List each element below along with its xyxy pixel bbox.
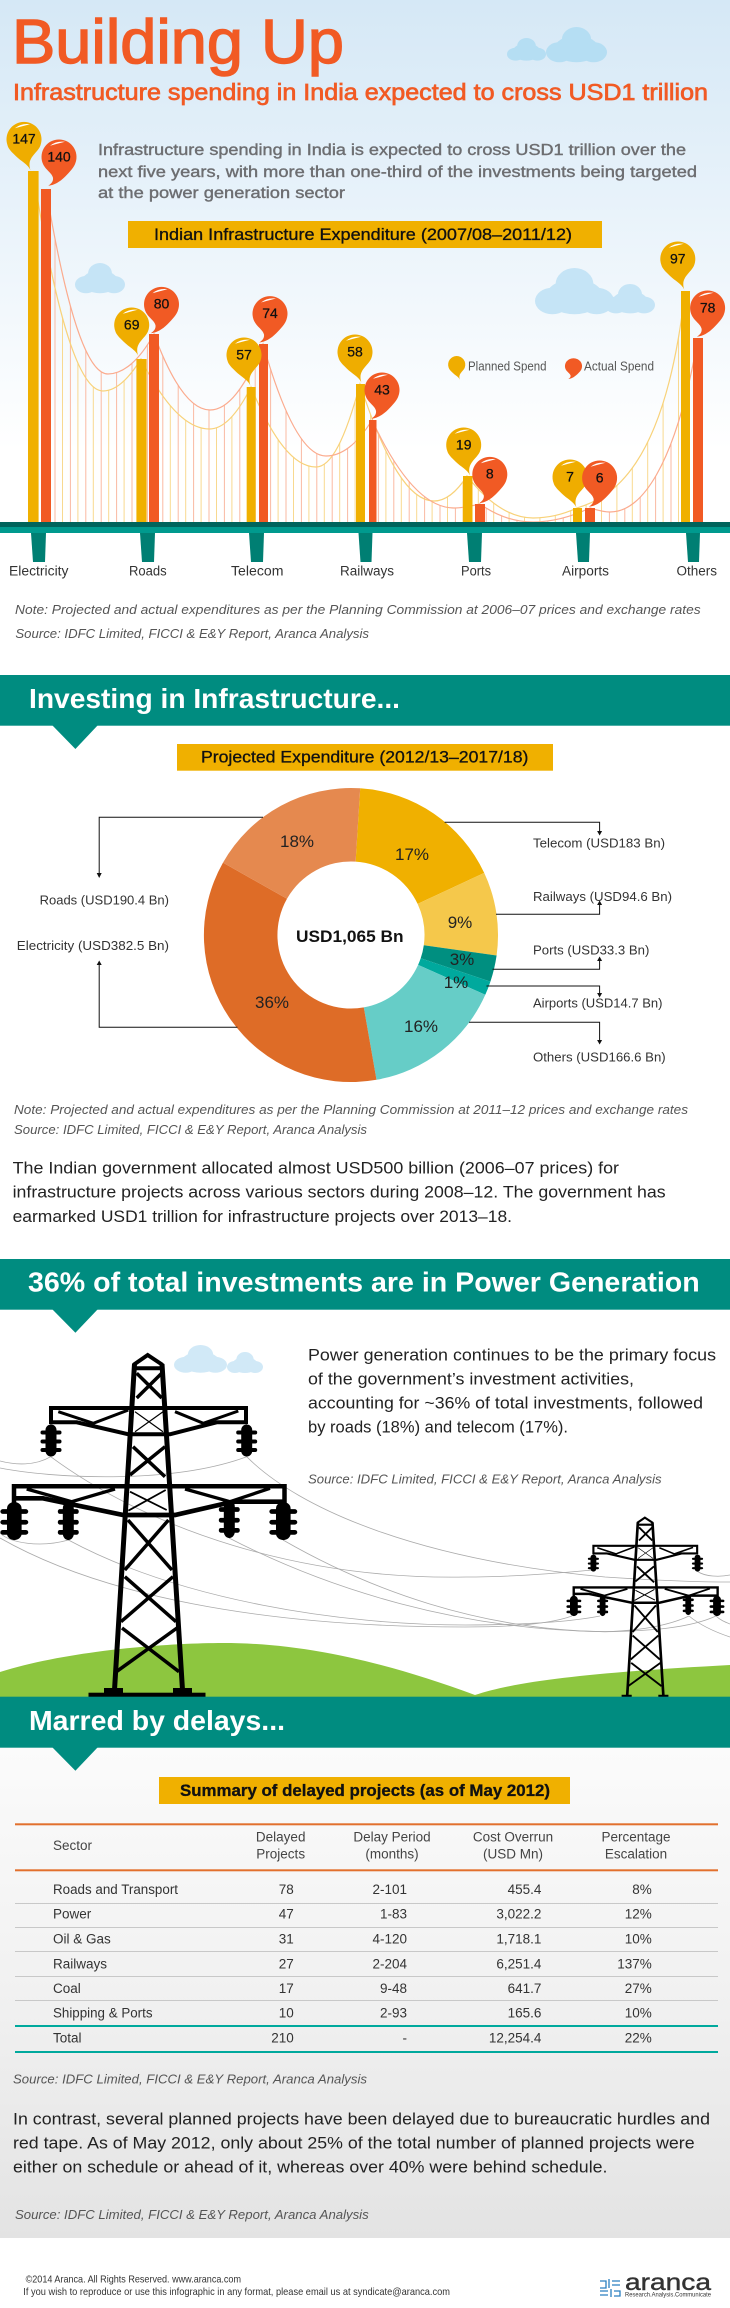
footer copyright: ©2014 Aranca. All Rights Reserved. www.aranca.com bbox=[26, 2274, 241, 2286]
power paragraph: accounting for ~36% of total investments, followed bbox=[308, 1393, 703, 1412]
pin: Roads actual 80 bbox=[144, 287, 179, 333]
section header: Marred by delays: Marred by delays... bbox=[29, 1705, 285, 1736]
pin: Roads planned 69: 69 bbox=[124, 316, 140, 332]
table header row: Escalation bbox=[605, 1846, 667, 1861]
hangers: actual cables bbox=[46, 189, 698, 522]
page background: sky bbox=[0, 0, 730, 675]
donut labels: Roads (USD190.4 Bn) bbox=[40, 892, 169, 907]
allocation paragraph bbox=[13, 1158, 666, 1226]
row: Total: 12,254.4 bbox=[489, 2031, 542, 2046]
allocation paragraph: The Indian government allocated almost USD500 billion (2006–07 prices) for bbox=[13, 1158, 619, 1177]
footer copyright: If you wish to reproduce or use this infographic in any format, please email us at syndicate@aranca.com bbox=[23, 2286, 450, 2298]
table header row: Projects bbox=[256, 1846, 305, 1861]
chart banner bbox=[128, 221, 602, 248]
large transmission tower bbox=[0, 1355, 297, 1698]
percentages: 36% bbox=[255, 993, 289, 1012]
donut banner: Projected Expenditure (2012/13–2017/18) bbox=[201, 749, 528, 767]
table rules bbox=[15, 1823, 718, 2053]
table header row: Percentage bbox=[601, 1830, 671, 1845]
axis labels: Roads bbox=[129, 564, 167, 579]
table banner bbox=[159, 1777, 570, 1804]
intro text: Infrastructure spending in India is expected to cross USD1 trillion over the bbox=[98, 142, 686, 159]
row: Shipping & Ports: 10% bbox=[625, 2006, 652, 2021]
row: Roads and Transport: 78 bbox=[279, 1882, 294, 1897]
row: Railways: 137% bbox=[617, 1956, 652, 1971]
row: Total: - bbox=[402, 2031, 407, 2046]
pin: Roads planned 69 bbox=[114, 307, 149, 356]
donut note: Note: Projected and actual expenditures as per the Planning Commission at 2011–12 prices and exchange rates bbox=[14, 1102, 689, 1117]
logo tagline: Research.Analysis.Communicate bbox=[625, 2293, 712, 2299]
row: Power: 47 bbox=[279, 1907, 294, 1922]
pin: Ports actual 8 bbox=[472, 457, 507, 503]
power paragraph: Power generation continues to be the primary focus bbox=[308, 1346, 716, 1365]
table header row: Delay Period bbox=[353, 1830, 431, 1845]
section header: Power Generation bbox=[0, 1259, 730, 1333]
row: Power: 12% bbox=[625, 1907, 652, 1922]
intro text: at the power generation sector bbox=[98, 185, 346, 202]
axis labels: Airports bbox=[562, 564, 609, 579]
row: Oil & Gas: 4-120 bbox=[372, 1931, 407, 1946]
section header: Power Generation: 36% of total investments are in Power Generation bbox=[28, 1267, 700, 1298]
table source: Source: IDFC Limited, FICCI & E&Y Report, Aranca Analysis bbox=[13, 2071, 368, 2086]
title: Building Up bbox=[12, 8, 344, 77]
legend: planned spend: Planned Spend bbox=[468, 359, 546, 374]
pin: Airports actual 6: 6 bbox=[596, 469, 604, 485]
allocation paragraph: infrastructure projects across various sectors during 2008–12. The government has bbox=[13, 1183, 666, 1202]
slice: Telecom 17% bbox=[356, 788, 484, 904]
pin: Electricity planned 147: 147 bbox=[12, 131, 36, 147]
axis labels: Electricity bbox=[9, 564, 69, 579]
pin: Railways actual 43 bbox=[364, 372, 400, 419]
table header row bbox=[53, 1830, 671, 1861]
hangers: planned cables bbox=[33, 171, 685, 522]
chart banner: Indian Infrastructure Expenditure (2007/08–2011/12) bbox=[154, 226, 572, 244]
row: Railways: 6,251.4 bbox=[496, 1956, 542, 1971]
bridge chart: planned vs actual spend bbox=[0, 122, 730, 579]
table header row: Cost Overrun bbox=[473, 1830, 553, 1845]
percentages bbox=[255, 832, 474, 1036]
donut total: USD1,065 Bn bbox=[296, 928, 404, 946]
axis labels: Telecom bbox=[231, 564, 284, 579]
donut labels: Airports (USD14.7 Bn) bbox=[533, 996, 662, 1011]
pin: Airports planned 7 bbox=[552, 459, 588, 508]
row: Roads and Transport bbox=[53, 1882, 652, 1897]
row: Roads and Transport: Roads and Transport bbox=[53, 1882, 178, 1897]
slice: Railways 9% bbox=[418, 873, 498, 956]
donut labels: Others (USD166.6 Bn) bbox=[533, 1050, 666, 1065]
percentages: 18% bbox=[280, 832, 314, 851]
row: Roads and Transport: 2-101 bbox=[372, 1882, 407, 1897]
row: Total bbox=[53, 2031, 652, 2046]
pin: Electricity planned 147 bbox=[7, 122, 42, 170]
bridge deck bbox=[0, 522, 730, 533]
percentages: 1% bbox=[444, 973, 468, 992]
delays paragraph: either on schedule or ahead of it, whereas over 40% were behind schedule. bbox=[13, 2158, 608, 2177]
pin: Others actual 78 bbox=[690, 290, 725, 337]
legend bbox=[448, 356, 654, 380]
donut labels: Electricity (USD382.5 Bn) bbox=[17, 938, 169, 953]
pin: Ports planned 19 bbox=[446, 427, 481, 476]
axis labels: Others bbox=[676, 564, 717, 579]
slice: Roads 18% bbox=[223, 788, 360, 899]
donut labels bbox=[17, 836, 672, 1065]
pin: Electricity actual 140 bbox=[42, 139, 76, 186]
pin: Railways planned 58: 58 bbox=[347, 343, 363, 359]
chart source: Source: IDFC Limited, FICCI & E&Y Report, Aranca Analysis bbox=[15, 626, 370, 641]
bars: planned spend bbox=[28, 171, 690, 523]
delays paragraph: In contrast, several planned projects have been delayed due to bureaucratic hurdles and bbox=[13, 2109, 710, 2128]
donut chart bbox=[204, 788, 498, 1082]
small transmission tower bbox=[566, 1518, 724, 1700]
pin: Telecom planned 57: 57 bbox=[236, 346, 252, 362]
power paragraph bbox=[308, 1346, 716, 1436]
row: Power bbox=[53, 1907, 652, 1922]
bridge pillars bbox=[31, 533, 700, 562]
axis labels bbox=[9, 564, 717, 579]
pin: Others planned 97 bbox=[660, 241, 695, 290]
row: Coal: 17 bbox=[279, 1981, 294, 1996]
pin: Ports actual 8: 8 bbox=[486, 466, 494, 482]
logo wordmark: aranca bbox=[625, 2269, 711, 2295]
row: Total: 22% bbox=[625, 2031, 652, 2046]
row: Oil & Gas bbox=[53, 1931, 652, 1946]
slice: Others 16% bbox=[364, 965, 485, 1080]
row: Coal: 641.7 bbox=[508, 1981, 541, 1996]
intro text bbox=[98, 142, 697, 202]
pin: Railways planned 58 bbox=[338, 334, 372, 383]
legend: actual spend bbox=[565, 358, 654, 379]
pin: Airports planned 7: 7 bbox=[566, 468, 574, 484]
pin: Telecom actual 74 bbox=[252, 296, 288, 342]
donut labels: Ports (USD33.3 Bn) bbox=[533, 942, 649, 957]
cloud: power section bbox=[174, 1345, 263, 1373]
slice: Electricity 36% bbox=[204, 863, 376, 1082]
row: Coal: 27% bbox=[625, 1981, 652, 1996]
section header: Investing in Infrastructure: Investing in Infrastructure... bbox=[29, 683, 400, 714]
footer copyright bbox=[23, 2274, 450, 2298]
row: Total: Total bbox=[53, 2031, 82, 2046]
pin: Airports actual 6 bbox=[582, 460, 617, 507]
table: delayed projects bbox=[15, 1823, 718, 2053]
row: Railways: Railways bbox=[53, 1956, 107, 1971]
donut connectors bbox=[97, 817, 602, 1044]
row: Oil & Gas: 10% bbox=[625, 1931, 652, 1946]
donut banner bbox=[177, 744, 553, 771]
axis labels: Railways bbox=[340, 564, 394, 579]
row: Shipping & Ports bbox=[53, 2006, 652, 2021]
delays paragraph: red tape. As of May 2012, only about 25% of the total number of planned projects were bbox=[13, 2134, 695, 2153]
row: Oil & Gas: 1,718.1 bbox=[496, 1931, 541, 1946]
legend: planned spend bbox=[448, 356, 546, 380]
logo icon bbox=[600, 2279, 620, 2297]
subtitle: Infrastructure spending in India expected to cross USD1 trillion bbox=[13, 79, 708, 105]
axis labels: Ports bbox=[461, 564, 491, 579]
row: Power: 1-83 bbox=[380, 1907, 407, 1922]
legend: actual spend: Actual Spend bbox=[584, 359, 654, 374]
row: Roads and Transport: 455.4 bbox=[508, 1882, 542, 1897]
section background: delays bbox=[0, 1747, 730, 2238]
row: Coal: Coal bbox=[53, 1981, 81, 1996]
row: Coal: 9-48 bbox=[380, 1981, 407, 1996]
pin: Railways actual 43: 43 bbox=[374, 381, 390, 397]
power lines bbox=[0, 1457, 730, 1637]
cable: planned spend bbox=[33, 171, 685, 518]
pin: Others planned 97: 97 bbox=[670, 250, 686, 266]
allocation paragraph: earmarked USD1 trillion for infrastructure projects over 2013–18. bbox=[13, 1207, 512, 1226]
percentages: 9% bbox=[448, 913, 472, 932]
cloud: top right bbox=[507, 27, 607, 62]
power paragraph: by roads (18%) and telecom (17%). bbox=[308, 1417, 568, 1436]
slice: Airports 1% bbox=[418, 958, 490, 995]
donut labels: Railways (USD94.6 Bn) bbox=[533, 889, 672, 904]
row: Shipping & Ports: Shipping & Ports bbox=[53, 2006, 153, 2021]
pin: Ports planned 19: 19 bbox=[456, 436, 472, 452]
table header row: (USD Mn) bbox=[483, 1846, 543, 1861]
cloud: right middle bbox=[535, 268, 655, 314]
row: Shipping & Ports: 2-93 bbox=[380, 2006, 407, 2021]
pin: Others actual 78: 78 bbox=[700, 299, 716, 315]
pin: Telecom planned 57 bbox=[226, 337, 262, 386]
percentages: 3% bbox=[450, 950, 474, 969]
cloud: left middle bbox=[75, 263, 125, 293]
delays source: Source: IDFC Limited, FICCI & E&Y Report, Aranca Analysis bbox=[15, 2207, 369, 2222]
row: Roads and Transport: 8% bbox=[632, 1882, 652, 1897]
donut labels: Telecom (USD183 Bn) bbox=[533, 836, 665, 851]
chart note: Note: Projected and actual expenditures as per the Planning Commission at 2006–07 prices and exchange rates bbox=[15, 602, 701, 617]
row: Power: 3,022.2 bbox=[496, 1907, 541, 1922]
row: Railways: 27 bbox=[279, 1956, 294, 1971]
table header row: Sector bbox=[53, 1838, 93, 1853]
power paragraph: of the government’s investment activities, bbox=[308, 1369, 634, 1388]
row: Oil & Gas: 31 bbox=[279, 1931, 294, 1946]
table banner: Summary of delayed projects (as of May 2012) bbox=[180, 1782, 550, 1800]
aranca logo bbox=[600, 2269, 712, 2299]
row: Railways bbox=[53, 1956, 652, 1971]
donut source: Source: IDFC Limited, FICCI & E&Y Report, Aranca Analysis bbox=[14, 1122, 367, 1137]
pin: Electricity actual 140: 140 bbox=[47, 148, 71, 164]
row: Oil & Gas: Oil & Gas bbox=[53, 1931, 111, 1946]
table header row: Delayed bbox=[256, 1830, 305, 1845]
row: Railways: 2-204 bbox=[372, 1956, 407, 1971]
power source: Source: IDFC Limited, FICCI & E&Y Report, Aranca Analysis bbox=[308, 1471, 662, 1486]
section header: Investing in Infrastructure bbox=[0, 675, 730, 749]
row: Shipping & Ports: 165.6 bbox=[508, 2006, 541, 2021]
row: Shipping & Ports: 10 bbox=[279, 2006, 294, 2021]
intro text: next five years, with more than one-third of the investments being targeted bbox=[98, 164, 697, 181]
percentages: 16% bbox=[404, 1017, 438, 1036]
slice: Ports 3% bbox=[421, 945, 497, 982]
cable: actual spend bbox=[46, 189, 698, 522]
green hills bbox=[0, 1643, 730, 1698]
table header row: (months) bbox=[365, 1846, 419, 1861]
pin: Roads actual 80: 80 bbox=[154, 296, 169, 312]
section header: Marred by delays bbox=[0, 1697, 730, 1771]
delays paragraph bbox=[13, 2109, 710, 2177]
row: Power: Power bbox=[53, 1907, 92, 1922]
percentages: 17% bbox=[395, 845, 429, 864]
pin: Telecom actual 74: 74 bbox=[262, 305, 278, 321]
row: Coal bbox=[53, 1981, 652, 1996]
bars: actual spend bbox=[41, 189, 703, 523]
row: Total: 210 bbox=[271, 2031, 294, 2046]
